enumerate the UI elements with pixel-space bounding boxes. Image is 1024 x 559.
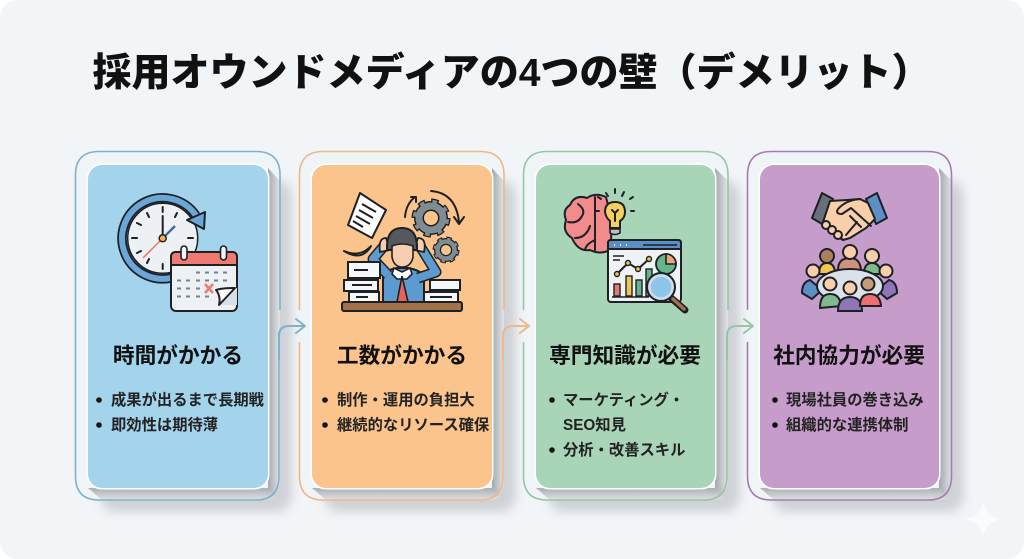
- panel: time: [76, 152, 292, 512]
- bullet list: [322, 391, 490, 434]
- heading: 専門知識が必要: [549, 343, 701, 368]
- bullet list: 組織的な連携体制: [786, 416, 908, 434]
- icon: sparkle watermark: [965, 501, 1001, 537]
- arrow: time to workload: [279, 319, 305, 360]
- heading: 工数がかかる: [337, 343, 467, 368]
- icon: overwhelmed worker: [342, 191, 464, 311]
- bullet list: SEO知見: [563, 416, 626, 434]
- arrow: workload to expertise: [503, 319, 529, 360]
- panel: workload: [300, 152, 516, 512]
- bullet list: 分析・改善スキル: [563, 441, 685, 459]
- bullet list: 現場社員の巻き込み: [786, 391, 924, 409]
- bullet list: 継続的なリソース確保: [337, 416, 490, 434]
- icon: handshake and team: [802, 193, 897, 311]
- panel: expertise: [524, 152, 740, 512]
- bullet list: 制作・運用の負担大: [337, 391, 475, 409]
- bullet list: 即効性は期待薄: [111, 416, 218, 434]
- bullet list: [549, 391, 685, 459]
- bullet list: [772, 391, 924, 434]
- heading: 時間がかかる: [113, 343, 243, 368]
- bullet list: マーケティング・: [563, 391, 684, 409]
- bullet list: [96, 391, 265, 434]
- panel: cooperation: [748, 152, 964, 512]
- arrow: expertise to cooperation: [727, 319, 753, 360]
- icon: clock and calendar: [122, 198, 237, 311]
- bullet list: 成果が出るまで長期戦: [111, 391, 265, 409]
- heading: 社内協力が必要: [773, 343, 925, 368]
- icon: brain, bulb and analytics: [565, 189, 685, 310]
- title: 採用オウンドメディアの4つの壁（デメリット）: [93, 51, 930, 95]
